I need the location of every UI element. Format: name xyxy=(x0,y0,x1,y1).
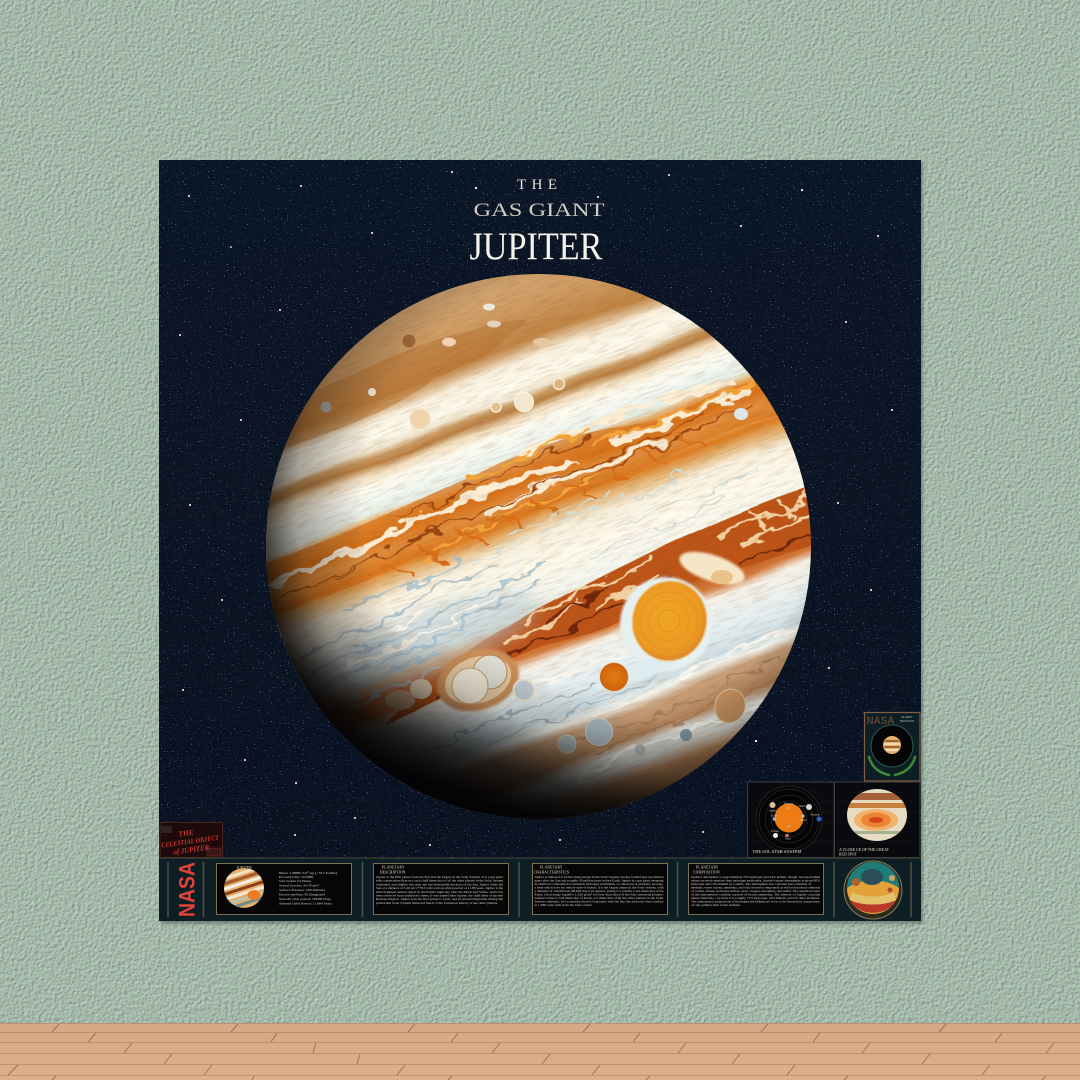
title line: the: THE xyxy=(517,177,557,193)
panel heading: PLANETARY xyxy=(696,866,719,870)
panel body text: denser materials—by mass it is roughly 71% hydrogen, 24% helium, and 5% other elements. xyxy=(691,896,820,901)
inset: nasa badge xyxy=(864,712,920,781)
inset: great red spot close-up xyxy=(834,782,920,858)
panel body text: at 1.068 solar radii from the Sun's center. xyxy=(534,903,593,907)
panel body text: hydrogen and 10% helium by volume. The atmosphere also contains trace amounts of xyxy=(691,882,812,886)
jupiter stats list: Eccentricity: 0.0489 xyxy=(279,875,313,879)
panel body text: years after the Sun and roughly 50 million years before Earth. Jupiter is a gas giant, meaning xyxy=(534,878,664,884)
badge caption xyxy=(900,716,914,723)
orbit diagram: Sun xyxy=(787,825,792,828)
white oval storms xyxy=(385,648,536,713)
panel heading xyxy=(693,866,720,874)
panel body text: a term which does not denote state of matter. It is the largest planet in the Solar System, with xyxy=(534,886,664,890)
swirling detail strokes xyxy=(268,380,811,778)
orbit diagram: Venus xyxy=(800,819,806,822)
panel body text: primordial Solar System impacted much of the formation history of the other planets. xyxy=(376,901,498,905)
panel heading: PLANETARY xyxy=(540,866,563,870)
panel: jupiter facts xyxy=(216,864,352,914)
panel title: JUPITER xyxy=(236,866,252,870)
orbit diagram: Uranus xyxy=(771,830,779,833)
badge nasa wordmark: NASA xyxy=(866,715,895,727)
panel body text: combined, and slightly less than one one-thousandth the mass of the Sun. Jupiter orbits the xyxy=(376,882,504,887)
emblem: round earth-like medallion xyxy=(844,861,902,919)
badge: red celestial object label: of JUPITER xyxy=(173,843,210,857)
jupiter stats list xyxy=(279,871,338,906)
planet cloud bands xyxy=(266,274,811,819)
night sky panel xyxy=(159,160,921,858)
panel body text: with a mass more than two and a half times that of all the other planets in the Solar System xyxy=(376,879,503,883)
strip column dividers xyxy=(168,862,911,917)
panel heading: DESCRIPTION xyxy=(380,870,406,874)
lower red belt xyxy=(385,487,811,726)
night-side shadow xyxy=(260,270,820,830)
panel body text: a diameter of 142,984 km (88,846 mi) at its equator, giving it a volume 1,321 times that of the xyxy=(534,889,664,894)
orbit diagram: Neptune xyxy=(810,814,820,816)
badge circle and planet xyxy=(871,725,913,767)
orbit diagram: Mars xyxy=(785,838,791,840)
close-up caption: A CLOSE UP OF THE GREAT xyxy=(839,848,890,852)
badge caption: FROM SUN xyxy=(900,720,914,723)
poster drop shadow xyxy=(161,162,923,924)
orbit diagram: Mercury xyxy=(784,802,794,806)
panel body text: third brightest natural object in the Earth's night sky after the Moon and Venus, and it has xyxy=(376,890,504,895)
nasa logo: NASA xyxy=(174,862,200,917)
orbit diagram xyxy=(756,786,822,852)
cloud ring around great red spot xyxy=(591,545,748,696)
jupiter stats list: Surface Pressure: 200-600 kPa xyxy=(279,888,325,892)
panel: planetary characteristics xyxy=(532,864,668,914)
jupiter stats list: Synodic orbit period: 398.88 Days xyxy=(279,897,332,901)
panel: planetary composition xyxy=(688,864,824,914)
badge: red celestial object label: THE xyxy=(178,828,194,839)
panel body text: Roman religion. Jupiter was the first planet to form, and its inward migration during the xyxy=(376,897,504,902)
panel body text: The atmospheric proportions of hydrogen and helium are close to the theoretical composition xyxy=(691,900,820,904)
blue-grey marble swirls xyxy=(301,554,546,712)
cloud grain texture xyxy=(266,274,811,778)
panel: planetary description xyxy=(374,864,508,914)
panel heading: COMPOSITION xyxy=(693,870,720,874)
panel body text: methane, water vapour, ammonia, and silicon-based compounds as well as fractional amounts xyxy=(691,886,821,890)
panel heading: PLANETARY xyxy=(382,866,405,870)
small orange storm xyxy=(600,662,628,692)
badge: red celestial object label xyxy=(160,822,222,858)
panel body text: of the primordial solar nebula. xyxy=(691,903,741,907)
panel body text: Jupiter's atmosphere is approximately 76% hydrogen and 24% helium, though, because helium xyxy=(691,875,820,880)
close-up caption xyxy=(839,848,890,856)
panel body text xyxy=(376,875,504,905)
panel body text xyxy=(691,875,821,907)
close-up caption: RED SPOT xyxy=(839,852,858,856)
panel heading: CHARACTERISTICS xyxy=(534,870,569,874)
jupiter stats list: Mass: 1.8986×10²⁷ kg (~317 Earths) xyxy=(279,871,338,875)
panel body text: been observed since prehistoric times. It was named after Jupiter, the chief deity of ancient xyxy=(376,894,503,898)
mottled lower belt xyxy=(554,656,786,756)
panel body text: its chemical composition is primarily hydrogen and helium, so called gas or planetary geology, xyxy=(534,882,664,887)
great red spot xyxy=(632,580,708,662)
badge laurel xyxy=(869,757,915,775)
wooden floor xyxy=(0,1023,1080,1080)
top dark speckled patches xyxy=(284,320,526,448)
panel body text: Sun at a distance of 5.20 AU (778.5 Gm) with an orbital period of 11.86 years. Jupiter is the xyxy=(376,886,504,890)
badge caption: PLANET xyxy=(902,716,913,719)
jupiter stats list: Solar System: Sol Planets xyxy=(279,879,312,883)
inset caption: THE SOL STAR SYSTEM xyxy=(752,850,802,854)
title xyxy=(470,177,605,268)
orange feather plumes xyxy=(379,428,710,585)
jupiter stats list: Known satellites: 95 Designated xyxy=(279,892,325,896)
panel heading xyxy=(534,866,569,874)
orbit diagram: Jupiter xyxy=(769,810,777,812)
title line: gas giant: GAS GIANT xyxy=(474,200,605,221)
icon: mini jupiter xyxy=(224,868,264,908)
orange turbulent belt xyxy=(266,380,778,609)
panel body text: of the atmosphere contains crystals of frozen ammonia. The interior of Jupiter contains xyxy=(691,892,821,896)
blue haze over marble region xyxy=(307,584,548,700)
poster xyxy=(159,160,924,926)
orbit diagram: Saturn xyxy=(798,805,806,808)
jupiter stats list: Sorted Gravity: 24.79 m/s² xyxy=(279,884,319,888)
panel body text: System combined. It is so massive that its barycenter with the Sun lies above the Sun's surface xyxy=(534,900,664,904)
badge: red celestial object label: CELESTIAL OBJECT xyxy=(161,834,220,850)
panel body text: Jupiter is the fifth planet from the Sun and the largest in the Solar System. It is a gas giant xyxy=(376,875,503,879)
close-up globe xyxy=(845,788,909,842)
inset: sol star system xyxy=(748,782,834,858)
red belt cream curls xyxy=(502,486,810,646)
panel body text: Jupiter is believed to be the oldest planet in the Solar System, having formed just one million xyxy=(534,875,664,880)
panel heading xyxy=(380,866,406,874)
title line: jupiter: JUPITER xyxy=(470,225,602,268)
orbit diagram: Earth xyxy=(771,814,778,818)
planet jupiter xyxy=(266,274,914,912)
panel body text: Jupiter's mass is 318 times that of Earth, 2.5 times that of all the other planets in the Solar xyxy=(534,896,664,901)
panel body text xyxy=(534,875,664,907)
panel body text: Earth. On average Jupiter's 1,326 g/cm³ is lower than those of the four terrestrial planets. xyxy=(534,892,664,898)
star field xyxy=(159,160,921,858)
bottom information strip xyxy=(159,858,921,921)
jupiter stats list: Sidereal Orbit Period: 11.864 Years xyxy=(279,902,333,906)
panel body text: of carbon, ethane, hydrogen sulfide, neon, oxygen, phosphine, and sulfur. The outermost layer xyxy=(691,889,821,894)
small spots and vortices xyxy=(320,304,750,756)
panel body text: atoms are more massive than hydrogen molecules, Jupiter's upper atmosphere is about 90% xyxy=(691,878,820,884)
